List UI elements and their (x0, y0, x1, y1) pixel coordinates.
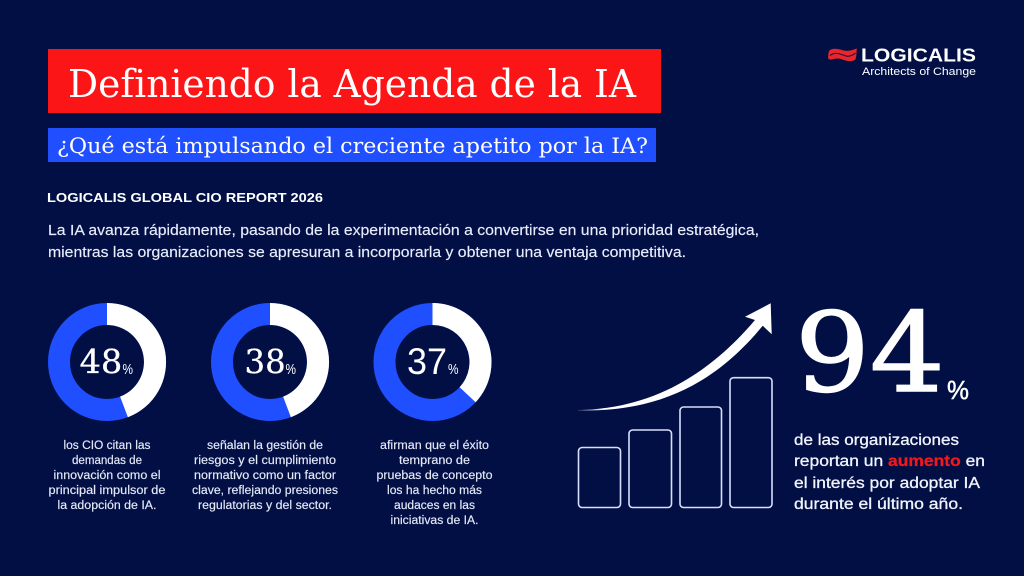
panel: stat 37% (376, 303, 492, 527)
caption 48%: principal impulsor de (48, 485, 166, 497)
big stat description (794, 432, 985, 513)
value 38%: % (286, 361, 296, 378)
big stat description: reportan un aumento en (794, 453, 985, 470)
caption 48%: innovación como el (54, 470, 160, 482)
subtitle (48, 128, 656, 162)
caption 37%: audaces en las (394, 500, 475, 512)
big stat description: de las organizaciones (794, 432, 959, 449)
report heading: LOGICALIS GLOBAL CIO REPORT 2026 (47, 190, 323, 205)
caption 37% (376, 440, 492, 527)
big stat 94%: 94 (795, 289, 945, 417)
donut chart 48% (59, 303, 166, 417)
arrow: rising trend (578, 303, 772, 411)
caption 37%: iniciativas de IA. (390, 515, 478, 527)
big stat description: el interés por adoptar IA (794, 475, 981, 492)
subtitle: ¿Qué está impulsando el creciente apetito por la IA? (57, 134, 648, 158)
value 48%: % (122, 361, 133, 378)
panel: stat 38% (192, 303, 338, 512)
panel: stat 48% (48, 303, 166, 512)
big stat 94%: % (947, 375, 969, 405)
caption 48%: la adopción de IA. (58, 500, 156, 512)
logo: Logicalis: Architects of Change (862, 66, 976, 78)
logo: Logicalis (828, 44, 976, 78)
donut chart 38% (222, 303, 329, 417)
caption 38%: riesgos y el cumplimiento (194, 455, 336, 467)
title (48, 49, 661, 113)
icon: red swoosh (828, 48, 857, 61)
donut chart 37% (384, 303, 492, 410)
intro text: mientras las organizaciones se apresuran a incorporarla y obtener una ventaja competitiva. (48, 245, 686, 261)
title: Definiendo la Agenda de la IA (68, 62, 637, 106)
big stat description: durante el último año. (794, 496, 963, 513)
caption 37%: los ha hecho más (387, 485, 482, 497)
caption 37%: afirman que el éxito (380, 440, 489, 452)
bar chart outline (578, 378, 772, 508)
value 38%: 38 (244, 343, 286, 381)
caption 38%: señalan la gestión de (207, 440, 323, 452)
caption 38%: regulatorias y del sector. (198, 500, 332, 512)
caption 48%: los CIO citan las (64, 440, 151, 452)
caption 37%: pruebas de concepto (376, 470, 492, 482)
caption 48%: demandas de (72, 455, 142, 467)
caption 38% (192, 440, 338, 512)
caption 38%: normativo como un factor (194, 470, 336, 482)
value 37%: % (448, 361, 458, 378)
caption 37%: temprano de (399, 455, 470, 467)
value 37%: 37 (407, 341, 447, 382)
intro text: La IA avanza rápidamente, pasando de la experimentación a convertirse en una prioridad estratégica, (48, 223, 759, 239)
caption 38%: clave, reflejando presiones (192, 485, 338, 497)
logo: Logicalis: LOGICALIS (861, 44, 976, 66)
caption 48% (48, 440, 166, 512)
value 48%: 48 (80, 342, 122, 381)
intro text (48, 223, 759, 261)
